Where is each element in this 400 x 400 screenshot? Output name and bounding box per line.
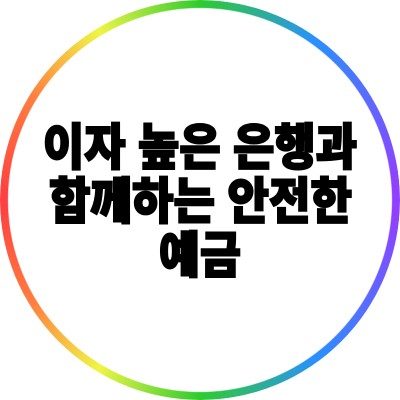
title line 3: 예금 <box>159 229 241 284</box>
title line 1: 이자 높은 은행과 <box>43 121 357 176</box>
title line 2: 함께하는 안전한 <box>49 175 352 230</box>
